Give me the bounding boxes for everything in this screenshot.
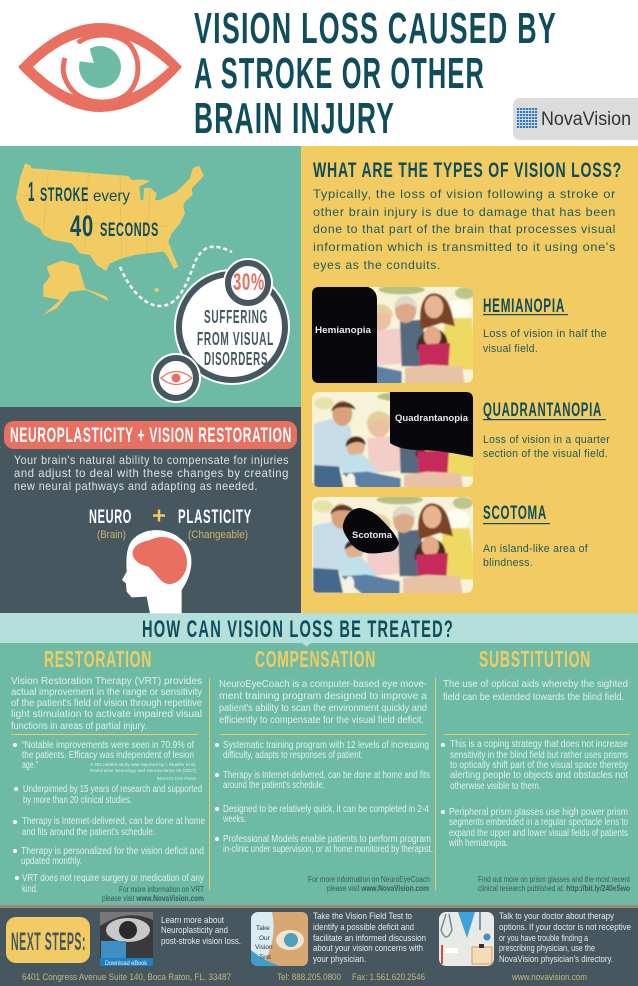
equation: neuro + plasticity: (Brain) (97, 529, 126, 541)
footer contact line: 6401 Congress Avenue Suite 140, Boca Raton, FL. 33487 (22, 972, 231, 983)
type: scotoma (483, 503, 589, 569)
equation: neuro + plasticity (89, 507, 252, 541)
bullet list: weeks. (222, 814, 246, 825)
stat: 1 stroke every 40 seconds: 1 (28, 176, 35, 207)
text: learn more: Learn more about (161, 915, 224, 926)
callout: 30 percent: DISORDERS (204, 349, 268, 369)
panel: substitution (441, 646, 631, 893)
more information note: For more information on VRT (119, 885, 204, 894)
bullet list (13, 740, 205, 895)
type: quadrantanopia: Loss of vision in a quarter (483, 434, 610, 446)
text: vision field test (313, 911, 426, 965)
panel: next steps: NEXT STEPS: (11, 928, 86, 956)
description (11, 675, 203, 732)
intro text: Typically, the loss of vision following a stroke or (313, 187, 616, 201)
more information note: please visit www.NovaVision.com (102, 894, 204, 903)
stat: 1 stroke every 40 seconds: SECONDS (100, 220, 159, 241)
type: scotoma: SCOTOMA (483, 503, 547, 524)
text: talk to your doctor: prescribing physician, use the (499, 943, 595, 954)
image: hemianopia (312, 287, 473, 383)
panel: stroke statistics (16, 163, 290, 403)
bullet list (215, 740, 433, 855)
intro text: eyes as the conduits. (313, 258, 441, 272)
text: vision field test: Take the Vision Field Test to (313, 911, 412, 922)
text: talk to your doctor (499, 911, 631, 965)
panel: types of vision loss (306, 159, 622, 600)
icon: head with brain (122, 530, 191, 613)
more information note (102, 885, 204, 903)
description: actual improvement in the range or sensitivity (11, 686, 203, 698)
image: ebook cover (100, 912, 153, 967)
bullet list: Systematic training program with 12 levels of increasing (223, 740, 429, 751)
stat: 1 stroke every 40 seconds: STROKE (40, 185, 89, 206)
bullet list: Therapy is Internet-delivered, can be done at home and fits (223, 770, 430, 781)
type: hemianopia: Loss of vision in half the (483, 328, 607, 340)
bullet list: Therapy is Internet-delivered, can be done at home (22, 816, 205, 827)
type: quadrantanopia: section of the visual field. (483, 448, 608, 460)
description: of the patient's field of vision through repetitive (11, 697, 202, 709)
stat: 1 stroke every 40 seconds: every (93, 188, 130, 205)
bullet list: difficulty, adapts to responses of patient. (223, 750, 363, 761)
more information note: For more information on NeuroEyeCoach (308, 875, 430, 884)
icon: large eye (18, 23, 182, 112)
image: ebook cover: Download eBook (105, 960, 148, 967)
column dividers (11, 678, 630, 890)
type: hemianopia (483, 296, 607, 355)
logo: NovaVision (513, 98, 638, 140)
more information note (308, 875, 430, 893)
bullet list: age.” (22, 760, 38, 771)
stat: 1 stroke every 40 seconds: 40 (70, 210, 94, 243)
bullet list: 563-572 IOS Press (157, 776, 197, 781)
description: efficiently to compensate for the visual field deficit. (219, 714, 424, 726)
callout: 30 percent: SUFFERING (204, 307, 268, 327)
text: vision field test: about your vision concerns with (313, 943, 423, 954)
bullet list: the patients. Efficacy was independent of lesion (22, 750, 194, 761)
title (194, 4, 557, 143)
description: light stimulation to activate impaired visual (11, 708, 202, 720)
more information note: please visit www.NovaVision.com (327, 884, 429, 893)
heading: COMPENSATION (255, 646, 376, 672)
callout: 30 percent (174, 258, 290, 385)
description (14, 453, 289, 493)
bullet list: in-clinic under supervision, or at home monitored by therapist. (223, 844, 433, 855)
logo: NovaVision: NovaVision (541, 109, 631, 130)
image: scotoma: Scotoma (352, 530, 393, 541)
callout: 30 percent: FROM VISUAL (197, 329, 274, 349)
map: United States (16, 163, 204, 315)
bullet list: by more than 20 clinical studies. (23, 795, 132, 806)
more information note (478, 875, 631, 893)
bullet list: otherwise visible to them. (450, 781, 541, 792)
image: vision test: Take (256, 925, 270, 932)
intro text (313, 187, 616, 272)
description (219, 678, 427, 726)
text: vision field test: your physician. (313, 954, 366, 965)
text: talk to your doctor: or you have trouble finding a (499, 933, 589, 944)
bullet list: Restorative Neurology and Neuroscience 25 (2007) (90, 768, 197, 773)
bullet list: Designed to be relatively quick, it can be completed in 2-4 (223, 804, 429, 815)
text: vision field test: identify a possible deficit and (313, 922, 414, 933)
description: ment training program designed to improve a (219, 690, 427, 702)
icon: small eye (151, 353, 201, 403)
footer contact line (22, 972, 587, 983)
image: doctor coat (439, 912, 494, 966)
next steps badge (6, 917, 90, 963)
text: vision field test: facilitate an informed discussion (313, 933, 426, 944)
image: quadrantanopia (312, 392, 473, 487)
bullet list: alerting people to objects and obstacles not (450, 770, 628, 781)
description: patient's ability to scan the environment quickly and (219, 702, 427, 714)
text: talk to your doctor: NovaVision physician's directory. (499, 954, 613, 965)
description: NeuroEyeCoach is a computer-based eye move- (219, 678, 427, 690)
bullet list: kind. (22, 884, 38, 895)
description: Your brain's natural ability to compensate for injuries (14, 453, 289, 467)
intro text: done to that part of the brain that processes visual (313, 222, 616, 236)
footer contact line: www.novavision.com (511, 972, 587, 983)
bullet list: A 302 patient study was reported by I. Mueller et al, (90, 762, 196, 767)
image: quadrantanopia: Quadrantanopia (395, 413, 469, 424)
intro text: other brain injury is due to damage that has been (313, 205, 616, 219)
bullet list: updated monthly. (21, 856, 82, 867)
description: and adjust to deal with these changes by creating (14, 466, 289, 480)
text: learn more: Neuroplasticity and (161, 925, 228, 936)
bullet list: Therapy is personalized for the vision deficit and (21, 846, 204, 857)
intro text: information which is transmitted to it using one's (313, 240, 616, 254)
bullet list: “Notable improvements were seen in 70.9% of (22, 740, 194, 751)
image: vision test: Vision (255, 944, 273, 951)
title: BRAIN INJURY (194, 94, 395, 143)
footer contact line: Fax: 1.561.620.2546 (352, 972, 425, 983)
bullet list: Underpinned by 15 years of research and supported (23, 784, 202, 795)
callout: 30 percent: 30% (233, 269, 265, 296)
description: functions in areas of partial injury. (11, 720, 147, 732)
stat: 1 stroke every 40 seconds (28, 176, 159, 243)
equation: neuro + plasticity: NEURO (89, 507, 132, 528)
banner heading (4, 421, 297, 449)
footer contact line: Tel: 888.205.0800 (277, 972, 341, 983)
description: Vision Restoration Therapy (VRT) provides (11, 675, 202, 687)
image: vision test: Test (259, 954, 271, 961)
text: talk to your doctor: Talk to your doctor about therapy (499, 911, 614, 922)
bullet list (441, 739, 628, 849)
bullet list: VRT does not require surgery or medication of any (22, 873, 204, 884)
panel: restoration (11, 646, 205, 903)
image: vision test: Our (259, 935, 271, 942)
type: scotoma: blindness. (483, 557, 533, 569)
heading: how can vision loss be treated (142, 616, 454, 646)
type: hemianopia: HEMIANOPIA (483, 296, 565, 317)
bullet list: around the patient's schedule. (223, 780, 325, 791)
image: vision test (251, 912, 308, 966)
bullet list: with hemianopia. (448, 838, 508, 849)
panel: neuroplasticity (4, 421, 297, 613)
bullet list: and fits around the patient's schedule. (22, 827, 155, 838)
banner heading: NEUROPLASTICITY + VISION RESTORATION (10, 424, 292, 447)
text: learn more: post-stroke vision loss. (161, 936, 241, 947)
description: new neural pathways and adapting as needed. (14, 479, 258, 493)
panel: compensation (215, 646, 433, 893)
description (443, 678, 628, 703)
dashed connector arrow (120, 247, 232, 306)
equation: neuro + plasticity: (Changeable) (188, 529, 248, 541)
image: hemianopia: Hemianopia (315, 325, 372, 336)
type: hemianopia: visual field. (483, 343, 538, 355)
bullet list: Professional Models enable patients to perform program (223, 834, 431, 845)
type: quadrantanopia (483, 400, 610, 460)
type: scotoma: An island-like area of (483, 543, 589, 555)
heading: RESTORATION (44, 646, 152, 672)
panel: next steps (6, 911, 631, 983)
image: scotoma (312, 497, 473, 593)
equation: neuro + plasticity: PLASTICITY (178, 507, 252, 528)
text: learn more (161, 915, 241, 947)
